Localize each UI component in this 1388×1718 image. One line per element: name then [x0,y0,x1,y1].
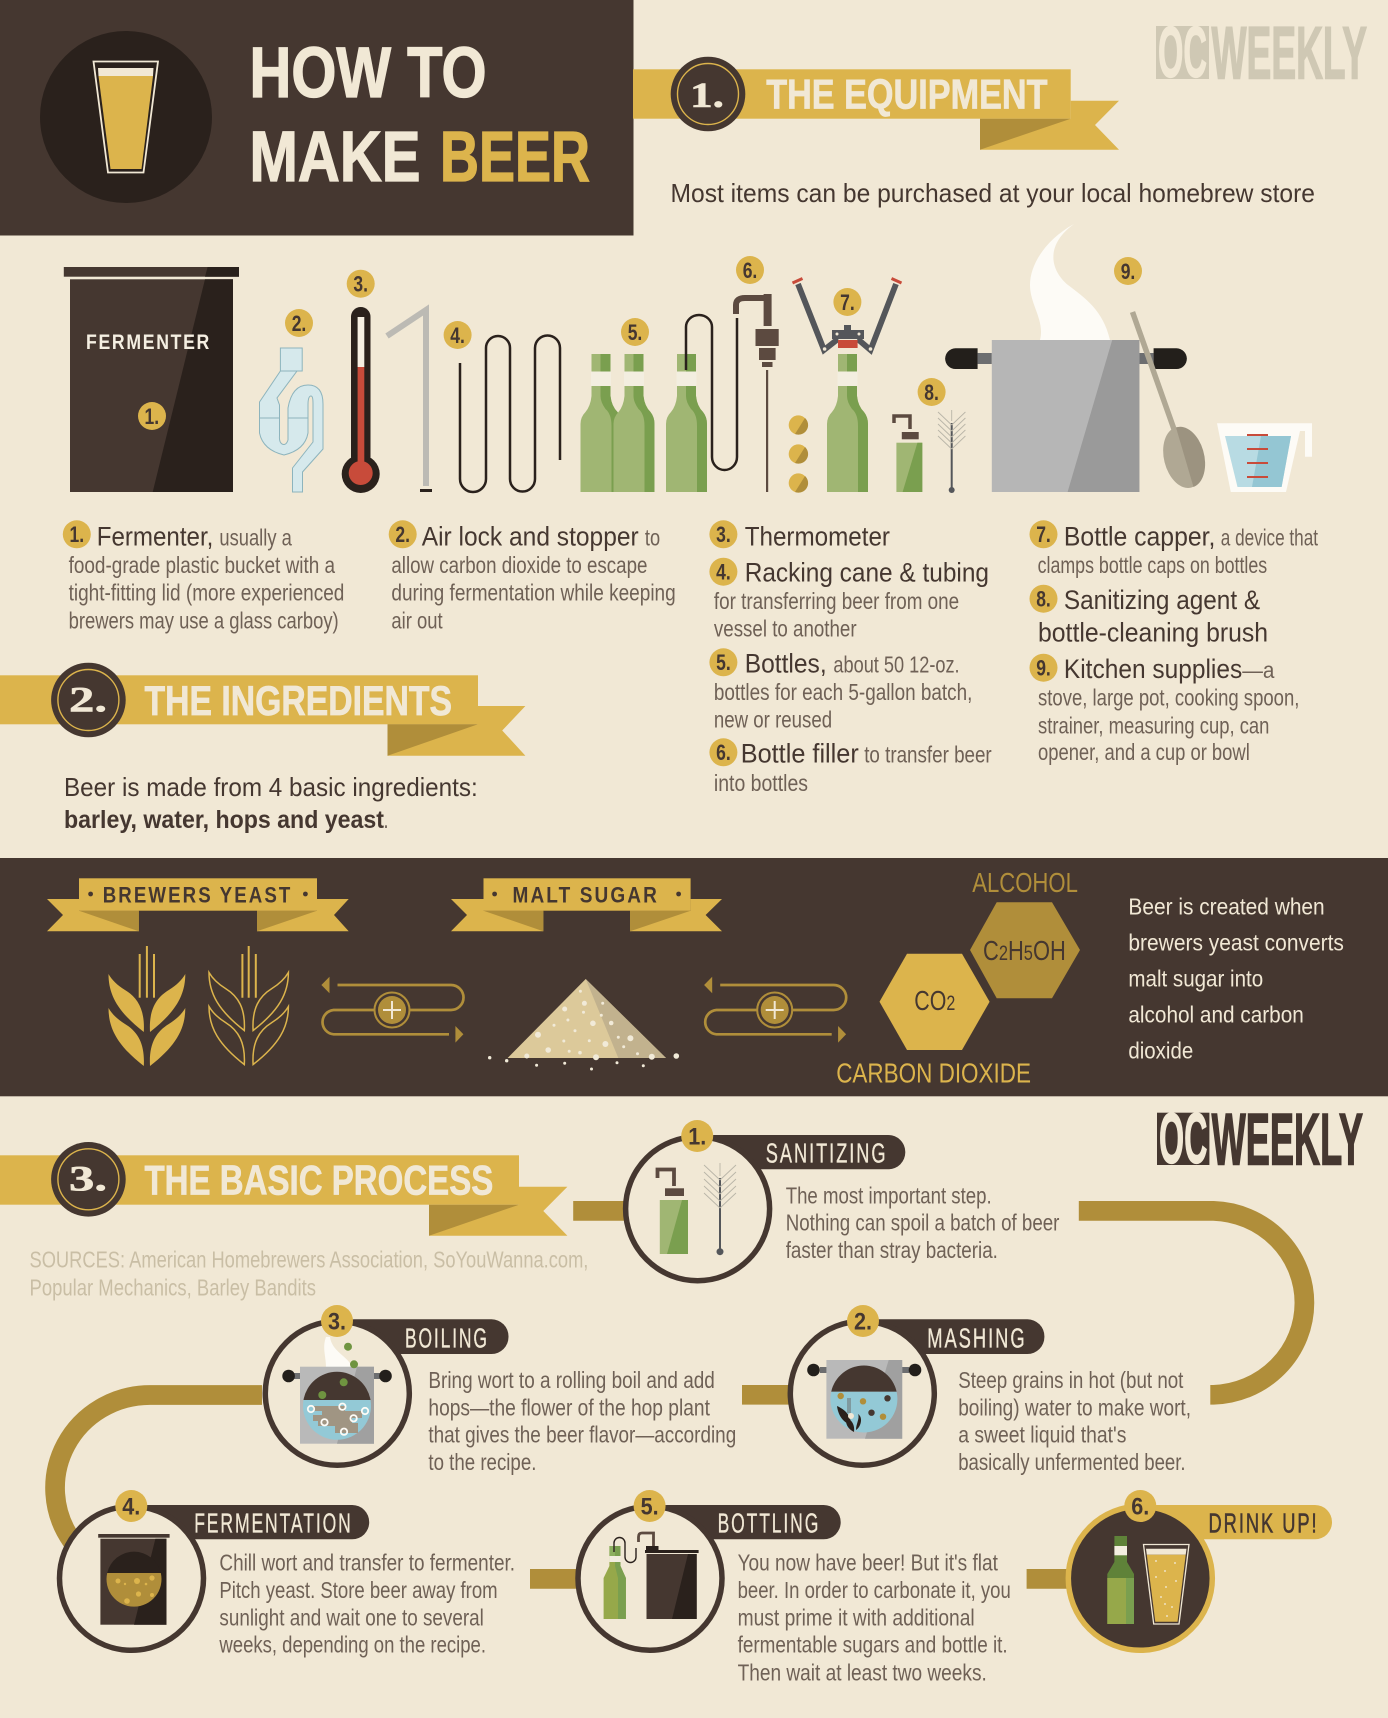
icon: air lock: 2. [292,311,306,336]
equipment list: column 4: clamps bottle caps on bottles [1038,552,1267,578]
icon: sanitizer and brush [894,378,965,493]
explanation text: brewers yeast converts [1128,929,1344,955]
equipment list: column 2: to [645,525,660,551]
section banner: the equipment: THE EQUIPMENT [766,71,1048,118]
step text: Nothing can spoil a batch of beer [786,1210,1060,1236]
icon: beer glass [40,31,212,203]
section banner: the basic process [0,1142,567,1236]
equipment list: column 3: 6. [716,740,731,765]
equipment list: column 3: Bottle filler [741,739,859,769]
step text: boiling) water to make wort, [958,1394,1191,1420]
equipment list: column 4: bottle-cleaning brush [1038,618,1268,648]
sources: SOURCES: American Homebrewers Association, SoYouWanna.com, [30,1247,588,1273]
equipment list: column 3: bottles for each 5-gallon batch, [714,679,972,705]
explanation text [1128,893,1344,1063]
step text [219,1550,515,1658]
icon: bottles [580,315,737,492]
panel: fermentation band [0,858,1388,1096]
step text: Pitch yeast. Store beer away from [219,1577,498,1603]
step text: Then wait at least two weeks. [738,1660,987,1686]
equipment list: column 1: usually a [219,525,292,551]
icon: barley filled [108,946,185,1066]
equipment list: column 1: tight-fitting lid (more experienced [69,580,344,606]
ingredients intro text: . [384,806,388,834]
hexagon: carbon dioxide [836,954,1031,1089]
hexagon: carbon dioxide: CARBON DIOXIDE [836,1058,1031,1089]
equipment illustrations [64,224,1312,493]
icon: sugar pile [488,979,679,1070]
logo: OC Weekly dark: OC [1159,1100,1207,1179]
icon: mash pot [807,1360,921,1439]
icon: barley outline [209,946,288,1064]
section banner: the basic process: THE BASIC PROCESS [144,1156,493,1203]
section banner: the ingredients: 2. [69,680,107,720]
equipment list: column 4: Kitchen supplies [1064,654,1242,684]
section banner: the basic process: 3. [69,1158,107,1198]
equipment list: column 2: during fermentation while keeping [391,580,676,606]
equipment list: column 3: into bottles [714,770,808,796]
equipment list: column 3: new or reused [714,707,832,733]
equipment list: column 4: 7. [1036,522,1051,547]
ribbon: brewers yeast: BREWERS YEAST [103,883,292,908]
ribbon: malt sugar: MALT SUGAR [512,883,659,908]
icon: fermenter: 1. [144,404,159,429]
title text: MAKE [250,118,420,197]
hexagon: alcohol: C2H5OH [983,935,1066,966]
icon: thermometer [342,270,380,493]
equipment list: column 1: brewers may use a glass carboy) [69,607,339,633]
equipment list: column 3: vessel to another [714,616,857,642]
step text: faster than stray bacteria. [786,1237,998,1263]
icon: air lock [260,309,323,492]
icon: sanitizer and brush [658,1163,736,1255]
equipment list: column 3: about 50 12-oz. [833,651,960,677]
equipment list: column 1: Fermenter, [97,522,213,552]
step 1: sanitizing: 1. [688,1124,706,1150]
equipment list: column 3: 3. [716,522,731,547]
icon: fermenter with yeast [98,1534,170,1625]
arrow: sugar to products [704,977,846,1043]
explanation text: alcohol and carbon [1128,1001,1304,1027]
icon: boil pot [282,1337,392,1444]
explanation text: dioxide [1128,1037,1193,1063]
step 6: drink up: DRINK UP! [1208,1508,1319,1539]
equipment list: column 2: 2. [395,522,410,547]
explanation text: Beer is created when [1128,893,1325,919]
step 4: fermentation [60,1490,515,1658]
title panel [0,0,634,236]
equipment list: column 4 [1030,520,1318,765]
icon: sanitizer and brush: 8. [924,380,939,405]
title text: HOW TO [250,34,486,113]
step text: Chill wort and transfer to fermenter. [219,1550,515,1576]
explanation text: malt sugar into [1128,965,1263,991]
equipment list: column 3: Racking cane & tubing [745,558,989,588]
step 4: fermentation: FERMENTATION [194,1508,353,1539]
equipment list: column 3: for transferring beer from one [714,588,959,614]
sources: Popular Mechanics, Barley Bandits [30,1274,316,1300]
icon: bottles: 5. [628,320,642,345]
step 1: sanitizing: SANITIZING [766,1138,888,1169]
icon: bottle and fermenter [604,1533,699,1619]
step 2: mashing: 2. [854,1308,872,1336]
section banner: the equipment: 1. [690,75,724,115]
equipment list: column 1: food-grade plastic bucket with a [69,552,335,578]
icon: racking cane and tubing [387,310,560,492]
equipment list: column 4: Bottle capper, [1064,522,1215,552]
icon: bottle filler [736,256,779,492]
section banner: the equipment [633,57,1119,150]
ingredients intro text [64,772,478,834]
hexagon: alcohol: ALCOHOL [972,867,1078,898]
step 4: fermentation: 4. [122,1494,140,1520]
title text [250,34,590,197]
equipment list: column 4: stove, large pot, cooking spoon, [1038,685,1299,711]
ingredients intro text: barley, water, hops and yeast [64,806,385,834]
icon: racking cane and tubing: 4. [450,323,465,348]
icon: thermometer: 3. [353,272,368,297]
icon: fermenter: FERMENTER [86,331,211,354]
step text: weeks, depending on the recipe. [219,1632,486,1658]
icon: measuring cup [1217,423,1312,492]
step 3: boiling: 3. [328,1308,346,1336]
step text: fermentable sugars and bottle it. [738,1632,1008,1658]
step 3: boiling [265,1305,736,1475]
subtitle: Most items can be purchased at your local homebrew store [670,178,1315,208]
equipment list: column 2: allow carbon dioxide to escape [391,552,647,578]
equipment list: column 3 [709,520,992,796]
ribbon: brewers yeast [47,878,349,931]
icon: spoon [1114,257,1210,492]
equipment list: column 4: —a [1242,657,1275,683]
icon: fermenter [64,267,239,492]
logo: OC Weekly faded: OC [1158,13,1207,93]
step 3: boiling: BOILING [405,1323,489,1354]
process connectors [55,1211,1304,1579]
equipment list: column 3: Thermometer [745,522,890,552]
equipment list: column 4: opener, and a cup or bowl [1038,739,1250,765]
equipment list: column 1 [63,520,344,633]
section banner: the ingredients: THE INGREDIENTS [144,677,452,724]
step text: that gives the beer flavor—according [428,1422,736,1448]
equipment list: column 1: 1. [70,522,84,547]
equipment list: column 4: a device that [1221,525,1318,551]
equipment list: column 4: strainer, measuring cup, can [1038,712,1269,738]
equipment list: column 4: Sanitizing agent & [1064,585,1260,615]
step text: to the recipe. [428,1449,536,1475]
step text [786,1182,1060,1263]
equipment list: column 3: to transfer beer [864,742,992,768]
equipment list: column 4: 8. [1036,586,1051,612]
step 5: bottling [578,1490,1011,1686]
step text: must prime it with additional [738,1604,975,1630]
equipment list: column 4: 9. [1036,656,1051,680]
logo: OC Weekly faded [1156,12,1367,94]
equipment list: column 3: 4. [716,560,731,584]
step text: basically unfermented beer. [958,1449,1186,1475]
logo: OC Weekly dark [1157,1100,1363,1180]
equipment list: column 3: Bottles, [745,648,827,678]
step 6: drink up: 6. [1131,1494,1149,1520]
step text: Steep grains in hot (but not [958,1367,1184,1393]
step 1: sanitizing [626,1120,1060,1281]
section banner: the ingredients [0,663,525,756]
icon: bottle capper [792,278,902,492]
step text: beer. In order to carbonate it, you [738,1577,1011,1603]
icon: bottle caps [789,415,808,493]
step text [958,1367,1191,1475]
step text [738,1550,1011,1686]
hexagon: carbon dioxide: CO2 [914,985,955,1016]
icon: bottle capper: 7. [840,290,855,315]
sources [30,1247,588,1300]
arrow: yeast plus sugar [321,977,463,1043]
ribbon: malt sugar [451,878,722,931]
step 2: mashing: MASHING [927,1323,1027,1354]
icon: cooking pot with steam [945,224,1187,492]
ingredients intro text: Beer is made from 4 basic ingredients: [64,772,478,802]
step text: The most important step. [786,1182,992,1208]
equipment list: column 2: air out [391,607,443,633]
step 5: bottling: 5. [641,1494,659,1520]
step text: sunlight and wait one to several [219,1604,484,1630]
equipment list: column 2: Air lock and stopper [422,522,639,552]
step text: Bring wort to a rolling boil and add [428,1367,715,1393]
icon: spoon: 9. [1121,259,1135,284]
icon: bottle filler: 6. [743,258,757,283]
step text: You now have beer! But it's flat [738,1550,998,1576]
step text: a sweet liquid that's [958,1422,1126,1448]
title text: BEER [440,118,590,197]
step 2: mashing [790,1305,1191,1475]
equipment list: column 2 [389,520,676,633]
icon: bottle and full glass [1107,1536,1189,1624]
step 5: bottling: BOTTLING [718,1508,820,1539]
hexagon: alcohol [970,867,1080,998]
equipment list: column 3: 5. [716,650,731,675]
step text: hops—the flower of the hop plant [428,1394,710,1420]
step 6: drink up [1068,1490,1332,1650]
step text [428,1367,736,1475]
